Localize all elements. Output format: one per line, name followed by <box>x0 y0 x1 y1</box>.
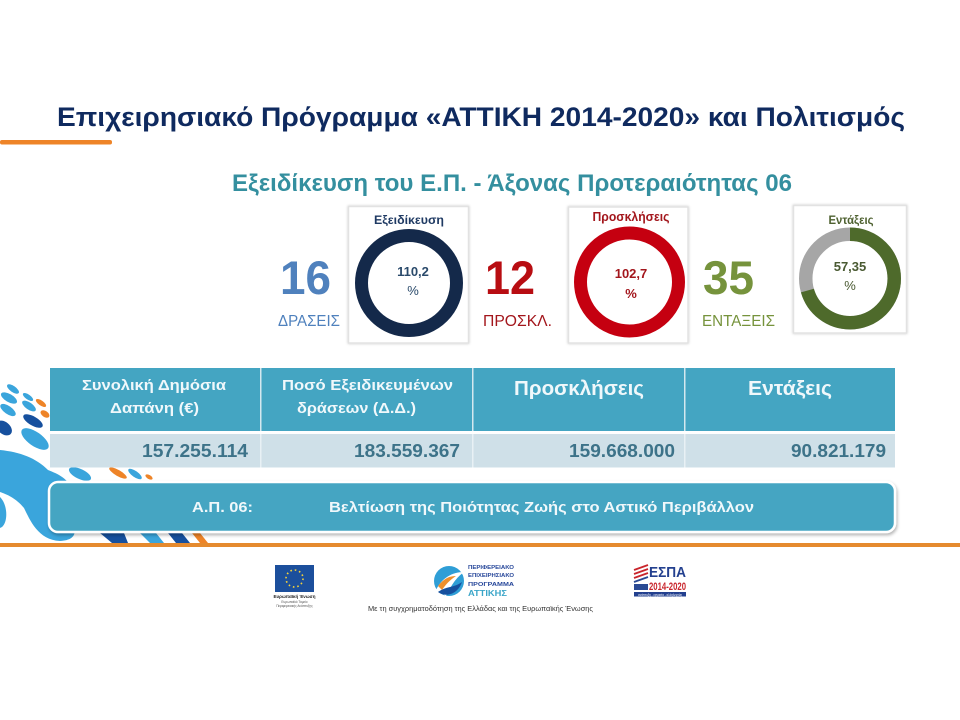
co-funding note: Με τη συγχρηματοδότηση της Ελλάδας και της Ευρωπαϊκής Ένωσης <box>368 604 594 613</box>
logo: ESPA 2014-2020: 2014-2020 <box>649 581 686 593</box>
table value row: 157.255.114 <box>142 440 249 461</box>
logo: European Union: Ευρωπαϊκό Ταμείο <box>281 600 308 604</box>
logo: Attica regional programme: ΠΡΟΓΡΑΜΜΑ <box>468 582 515 588</box>
stat: 35 inclusions: ΕΝΤΑΞΕΙΣ <box>702 313 775 330</box>
logo: ESPA 2014-2020: ΕΣΠΑ <box>649 564 686 581</box>
stat: 12 calls: ΠΡΟΣΚΛ. <box>483 313 552 330</box>
orange footer rule <box>0 543 960 547</box>
logo: ESPA 2014-2020: ανάπτυξη - εργασία - αλληλεγγύη <box>638 593 682 597</box>
logo: Attica regional programme: ΑΤΤΙΚΗΣ <box>468 589 507 598</box>
table header row: δράσεων (Δ.Δ.) <box>297 400 416 417</box>
panel: calls donut: % <box>625 286 637 301</box>
stat: 16 actions: ΔΡΑΣΕΙΣ <box>278 313 340 330</box>
decorative swirl logo fragment <box>0 383 208 543</box>
panel: calls donut: 102,7 <box>615 266 647 281</box>
logo: European Union <box>274 565 316 608</box>
table header row <box>50 368 895 431</box>
data table <box>50 368 895 468</box>
panel: specialisation donut: 110,2 <box>397 264 429 279</box>
logo: European Union: Ευρωπαϊκή Ένωση <box>274 594 316 599</box>
table header row: Προσκλήσεις <box>514 378 644 400</box>
stat: 35 inclusions <box>702 251 775 330</box>
stat: 12 calls <box>483 251 552 330</box>
table value row: 90.821.179 <box>791 440 886 461</box>
stat: 12 calls: 12 <box>485 251 535 304</box>
panel: specialisation donut: Εξειδίκευση <box>374 213 444 227</box>
panel: calls donut <box>568 207 688 343</box>
stat: 16 actions <box>278 251 340 330</box>
logo: ESPA 2014-2020 <box>634 564 686 597</box>
subtitle: Εξειδίκευση του Ε.Π. - Άξονας Προτεραιότητας 06 <box>232 170 792 197</box>
title: Επιχειρησιακό Πρόγραμμα «ΑΤΤΙΚΗ 2014-2020» και Πολιτισμός <box>57 102 905 132</box>
priority axis banner <box>49 482 895 532</box>
panel: inclusions donut <box>794 206 906 333</box>
priority axis banner: Βελτίωση της Ποιότητας Ζωής στο Αστικό Περιβάλλον <box>329 499 754 516</box>
table value row: 183.559.367 <box>354 440 460 461</box>
priority axis banner: Α.Π. 06: <box>192 499 253 516</box>
table header row: Δαπάνη (€) <box>110 400 199 417</box>
table header row: Συνολική Δημόσια <box>82 377 227 394</box>
table header row: Ποσό Εξειδικευμένων <box>282 377 453 394</box>
panel: inclusions donut: % <box>844 278 856 293</box>
logo: Attica regional programme: ΕΠΙΧΕΙΡΗΣΙΑΚΟ <box>468 573 515 579</box>
logo: Attica regional programme: ΠΕΡΙΦΕΡΕΙΑΚΟ <box>468 565 514 571</box>
table value row <box>50 434 895 468</box>
table value row: 159.668.000 <box>569 440 675 461</box>
panel: specialisation donut <box>348 206 468 343</box>
stat: 35 inclusions: 35 <box>703 251 754 304</box>
orange title underline <box>0 140 112 144</box>
logo: Attica regional programme <box>434 565 515 598</box>
panel: inclusions donut: Εντάξεις <box>828 215 874 227</box>
logo: European Union: Περιφερειακής Ανάπτυξης <box>276 604 313 608</box>
table header row: Εντάξεις <box>748 378 832 400</box>
panel: calls donut: Προσκλήσεις <box>592 210 670 224</box>
panel: specialisation donut: % <box>407 283 419 298</box>
panel: inclusions donut: 57,35 <box>834 259 866 274</box>
stat: 16 actions: 16 <box>280 251 331 304</box>
